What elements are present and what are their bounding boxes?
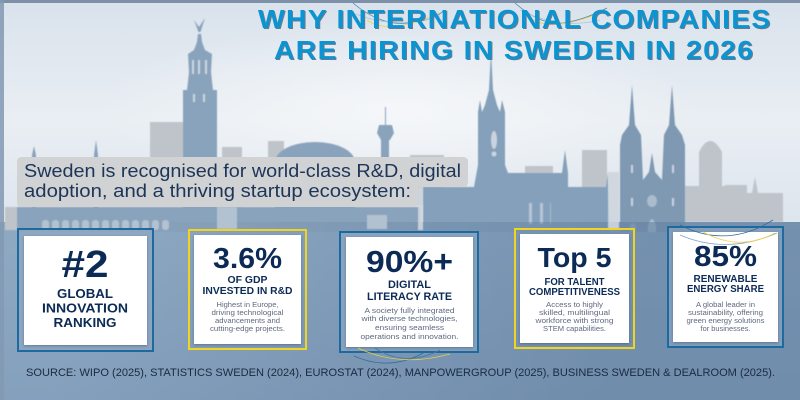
card: talent competitiveness: FOR TALENT <box>544 276 605 288</box>
decorative waves: top of card <box>680 220 777 245</box>
card: renewable energy share: sustainability, offering <box>688 310 763 317</box>
title <box>258 4 771 66</box>
card: talent competitiveness: workforce with strong <box>534 318 614 325</box>
dark blue-grey landmarks <box>17 18 420 232</box>
light background buildings <box>5 122 783 230</box>
decorative waves: title <box>353 3 607 27</box>
card: GDP invested in R&D <box>189 230 306 349</box>
card: digital literacy rate: 90%+ <box>366 244 453 279</box>
card: renewable energy share: RENEWABLE <box>694 273 758 285</box>
card: global innovation ranking: INNOVATION <box>42 302 128 316</box>
building windows <box>192 60 674 232</box>
card: renewable energy share: 85% <box>694 241 757 273</box>
card: renewable energy share: ENERGY SHARE <box>687 283 764 295</box>
source line: SOURCE: WIPO (2025), STATISTICS SWEDEN (2024), EUROSTAT (2024), MANPOWERGROUP (2025), BUSINESS SWEDEN & DEALROOM (2025). <box>26 367 775 379</box>
skyline illustration <box>5 18 783 232</box>
card: GDP invested in R&D: cutting-edge projects. <box>210 326 285 333</box>
card: global innovation ranking: #2 <box>62 244 108 286</box>
title: WHY INTERNATIONAL COMPANIES <box>259 5 771 35</box>
title: ARE HIRING IN SWEDEN IN 2026 <box>274 35 753 65</box>
card: talent competitiveness: STEM capabilities. <box>543 326 606 333</box>
card: GDP invested in R&D: driving technological <box>212 310 284 317</box>
card: talent competitiveness: Access to highly <box>546 302 604 309</box>
card: global innovation ranking: RANKING <box>54 316 116 330</box>
card: GDP invested in R&D: INVESTED IN R&D <box>202 285 293 297</box>
card: digital literacy rate: with diverse technologies, <box>360 316 458 323</box>
intro callout: adoption, and a thriving startup ecosystem: <box>24 181 411 201</box>
card: GDP invested in R&D: Highest in Europe, <box>216 302 279 309</box>
title: ARE HIRING IN SWEDEN IN 2026 <box>275 36 754 66</box>
card: digital literacy rate: DIGITAL <box>388 279 431 291</box>
intro callout <box>17 157 468 207</box>
card: talent competitiveness: COMPETITIVENESS <box>529 286 620 298</box>
card: global innovation ranking: GLOBAL <box>57 287 113 301</box>
card: renewable energy share: A global leader in <box>696 302 755 309</box>
title: WHY INTERNATIONAL COMPANIES <box>258 4 770 34</box>
card: digital literacy rate <box>340 232 478 352</box>
skyline base details <box>42 172 619 230</box>
card: GDP invested in R&D: advancements and <box>215 318 280 325</box>
card: digital literacy rate: operations and innovation. <box>360 334 459 341</box>
card: renewable energy share: for businesses. <box>700 326 751 333</box>
card: talent competitiveness: skilled, multilingual <box>539 310 611 317</box>
ground shading <box>0 222 800 400</box>
card: global innovation ranking <box>18 229 153 351</box>
card: digital literacy rate: A society fully integrated <box>364 308 455 315</box>
card: renewable energy share: green energy solutions <box>686 318 765 325</box>
card: talent competitiveness <box>515 229 634 348</box>
intro callout: Sweden is recognised for world-class R&D, digital <box>24 161 461 181</box>
card: digital literacy rate: ensuring seamless <box>375 325 445 332</box>
card: renewable energy share <box>668 227 783 347</box>
card: GDP invested in R&D: 3.6% <box>213 243 282 275</box>
card: GDP invested in R&D: OF GDP <box>228 274 268 286</box>
decorative waves: below card <box>354 348 450 363</box>
card: digital literacy rate: LITERACY RATE <box>367 291 452 303</box>
card: talent competitiveness: Top 5 <box>538 242 612 273</box>
